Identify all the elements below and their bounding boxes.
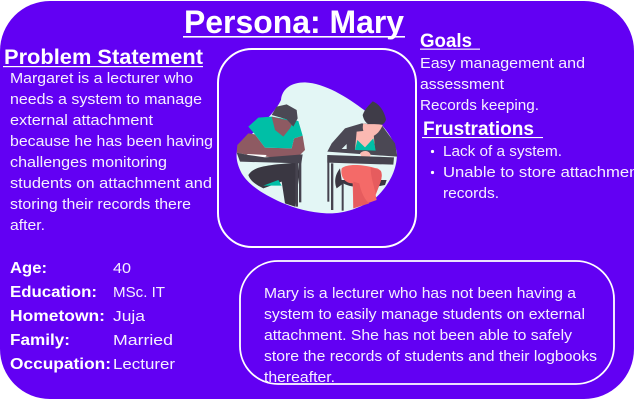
text block: scenario: system to easily manage students on external <box>264 307 585 323</box>
blob background <box>237 82 397 213</box>
text block: scenario: store the records of students and their logbooks <box>264 349 597 365</box>
text block: goals: Easy management and <box>420 55 585 72</box>
text block: problem statement: needs a system to manage <box>10 91 202 108</box>
panel: illustration frame <box>218 49 416 247</box>
persona details: Juja <box>113 308 146 325</box>
list: frustrations: Unable to store attachment <box>443 164 634 181</box>
text block: scenario <box>264 286 597 386</box>
text block: scenario: attachment. She has not been able to safely <box>264 328 573 344</box>
persona details: Occupation: <box>10 356 111 373</box>
list: frustrations: records. <box>443 185 499 202</box>
text block: problem statement: storing their records there <box>10 196 191 213</box>
title: Persona: Mary <box>184 4 404 40</box>
list: frustrations <box>431 143 634 202</box>
text block: goals <box>420 55 585 114</box>
persona details: 40 <box>113 260 131 277</box>
text block: problem statement: because he has been having <box>10 133 213 150</box>
student right <box>327 101 397 211</box>
persona details: Age: <box>10 260 47 277</box>
text block: problem statement: after. <box>10 217 45 234</box>
illustration: two students writing at desks <box>237 82 397 213</box>
persona details: Married <box>113 332 173 349</box>
text block: goals: Records keeping. <box>420 97 539 114</box>
text block: problem statement: challenges monitoring <box>10 154 167 171</box>
text block: goals: assessment <box>420 76 505 93</box>
text block: problem statement: external attachment <box>10 112 154 129</box>
persona details: Lecturer <box>113 356 175 373</box>
text block: scenario: thereafter. <box>264 370 335 386</box>
persona details: Hometown: <box>10 308 105 325</box>
text block: problem statement: Margaret is a lecturer who <box>10 70 193 87</box>
heading: frustrations: Frustrations <box>423 119 534 140</box>
heading: goals: Goals <box>420 31 472 52</box>
persona details: Family: <box>10 332 70 349</box>
persona details: Education: <box>10 284 97 301</box>
text block: problem statement <box>10 70 213 234</box>
heading: problem statement: Problem Statement <box>4 46 203 69</box>
text block: scenario: Mary is a lecturer who has not been having a <box>264 286 577 302</box>
persona details <box>10 260 175 373</box>
student left <box>237 104 305 207</box>
text block: problem statement: students on attachment and <box>10 175 212 192</box>
list: frustrations: Lack of a system. <box>443 143 562 160</box>
persona details: MSc. IT <box>113 284 165 301</box>
panel: scenario box <box>240 261 614 384</box>
